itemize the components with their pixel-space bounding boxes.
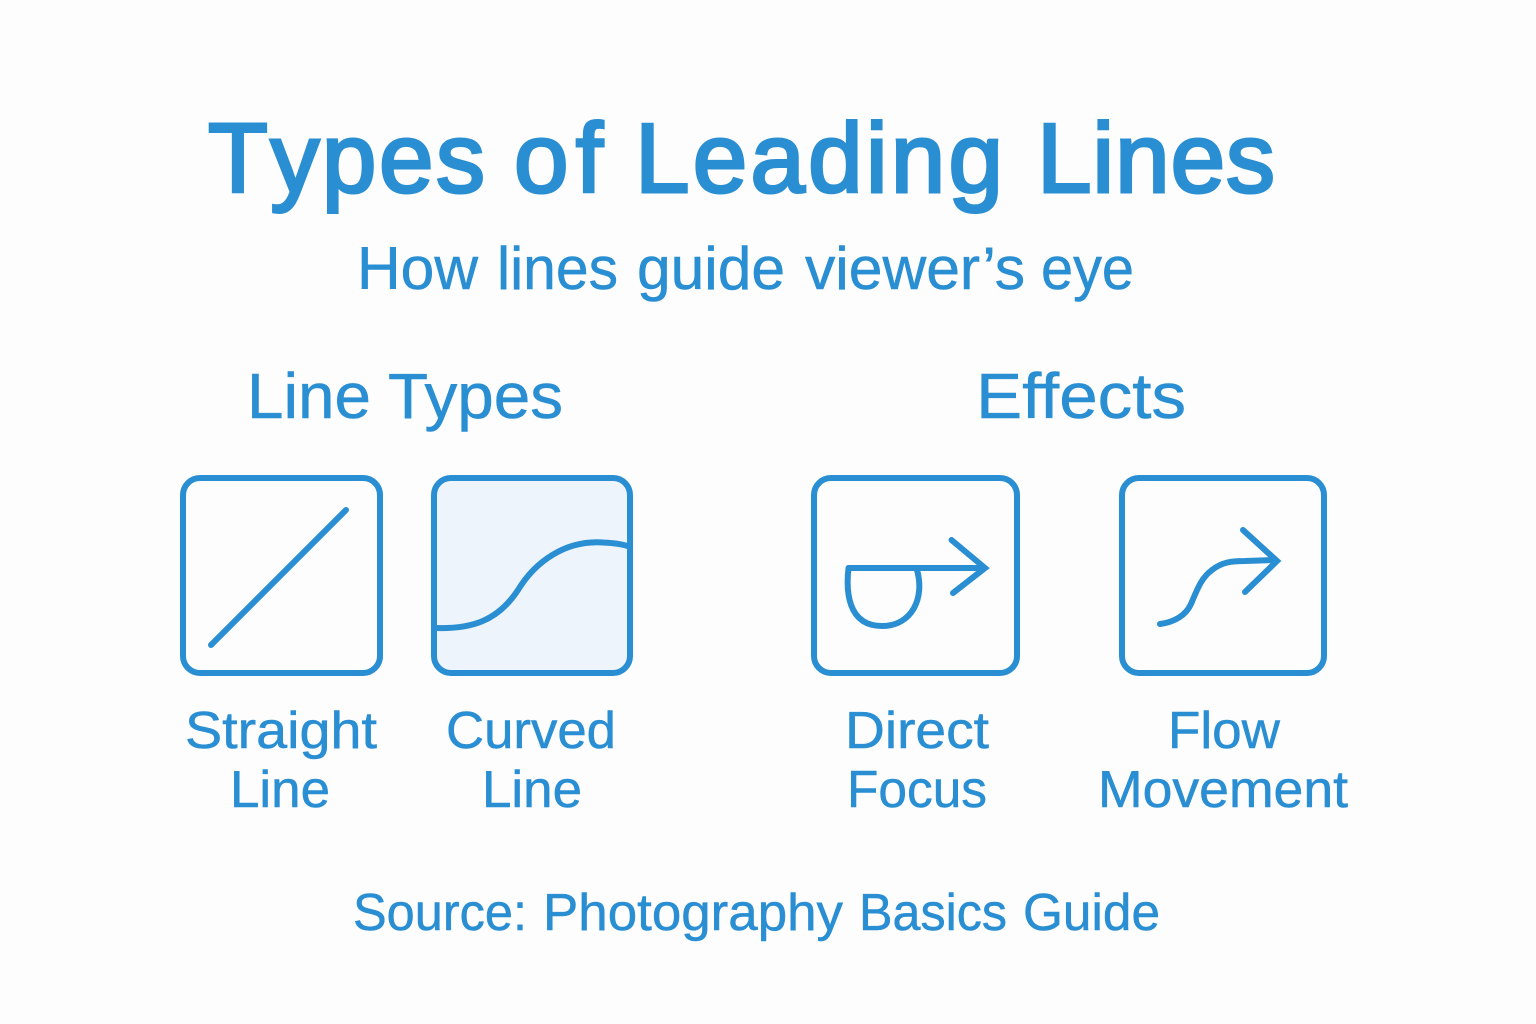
icon: flow movement box bbox=[1122, 478, 1324, 673]
source note: Basics bbox=[859, 884, 1007, 942]
label: direct focus: Direct bbox=[845, 702, 990, 760]
title: Types bbox=[208, 103, 485, 213]
subtitle: viewer’s bbox=[805, 235, 1025, 302]
label: curved line: Curved bbox=[446, 702, 616, 760]
label: flow movement: Flow bbox=[1168, 702, 1280, 760]
title: of bbox=[514, 103, 604, 213]
label: flow movement: Movement bbox=[1098, 761, 1349, 819]
label: direct focus: Focus bbox=[847, 761, 987, 819]
heading: effects: Effects bbox=[976, 360, 1186, 432]
heading: line types: Line Types bbox=[247, 360, 563, 432]
icon: curved line box bbox=[434, 478, 630, 673]
label: straight line: Straight bbox=[185, 702, 378, 760]
label: curved line: Line bbox=[482, 761, 582, 819]
card: flow movement bbox=[1098, 478, 1349, 819]
card: direct focus bbox=[814, 478, 1017, 819]
source note: Photography bbox=[543, 884, 843, 942]
source note: Guide bbox=[1023, 884, 1160, 942]
subtitle: guide bbox=[637, 235, 785, 302]
card: straight line bbox=[183, 478, 380, 819]
icon: straight line box bbox=[183, 478, 380, 673]
card: curved line bbox=[434, 478, 630, 819]
subtitle: How bbox=[357, 235, 479, 302]
source note: Source: bbox=[353, 884, 527, 942]
subtitle: eye bbox=[1041, 235, 1134, 302]
subtitle: lines bbox=[497, 235, 618, 302]
icon: direct focus box bbox=[814, 478, 1017, 673]
label: straight line: Line bbox=[230, 761, 330, 819]
title: Lines bbox=[1037, 103, 1275, 213]
title: Leading bbox=[635, 103, 1003, 213]
